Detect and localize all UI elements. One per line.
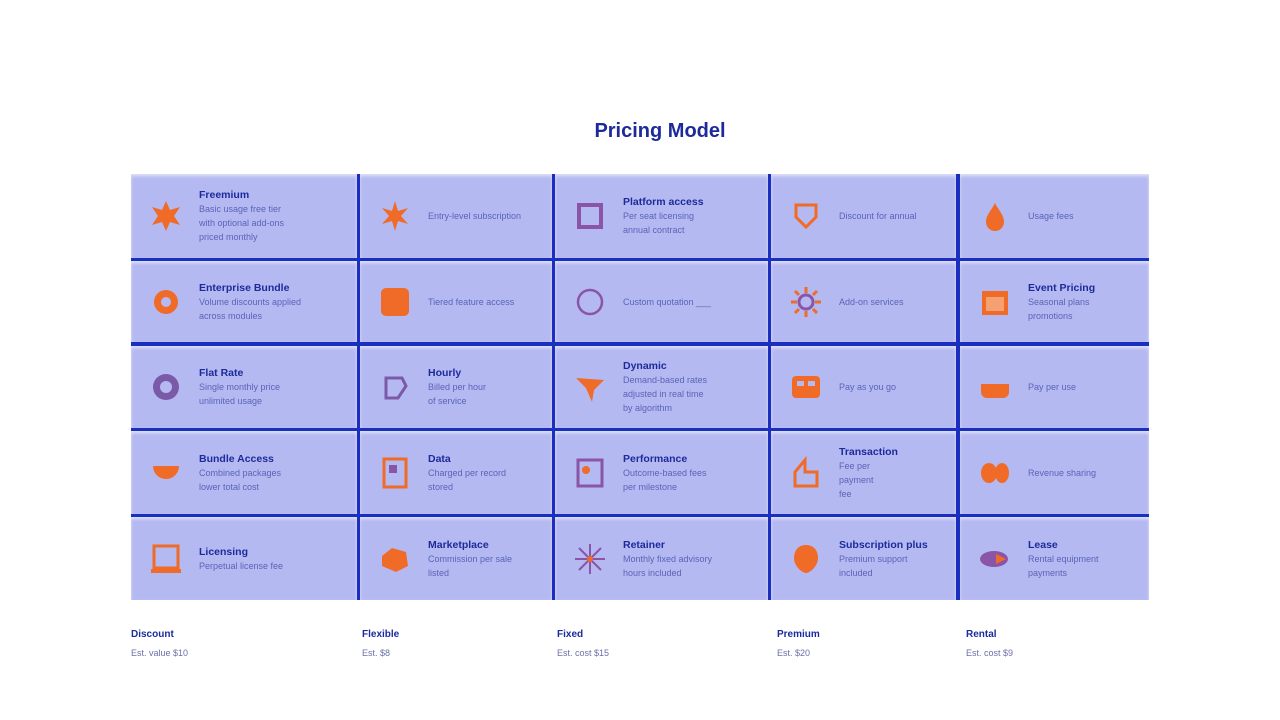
cell r2c5 — [960, 261, 1149, 342]
cell r4c1: Bundle Access — [199, 452, 274, 464]
cell r2c1: Volume discounts applied — [199, 296, 301, 306]
cell r2c5: Event Pricing — [1028, 282, 1095, 294]
cell r2c2: Tiered feature access — [428, 296, 514, 306]
cell r5c5: Lease — [1028, 538, 1058, 550]
cell r4c1: lower total cost — [199, 482, 259, 492]
cell r5c4: Premium support — [839, 554, 908, 564]
cell r1c3 — [555, 174, 768, 258]
cell r5c2: Marketplace — [428, 538, 489, 550]
cell r3c3 — [555, 346, 768, 428]
cell r3c5 — [960, 346, 1149, 428]
cell r4c4: payment — [839, 474, 874, 484]
legend: column 1: Est. value $10 — [131, 648, 188, 658]
cell r4c2 — [360, 431, 552, 514]
cell r1c1: with optional add-ons — [199, 218, 284, 228]
legend: column 5: Est. cost $9 — [966, 648, 1013, 658]
cell r4c2: Data — [428, 452, 451, 464]
cell r4c4: Transaction — [839, 446, 898, 458]
cell r3c1 — [131, 346, 357, 428]
cell r1c2: Entry-level subscription — [428, 211, 521, 221]
legend: column 3 — [557, 629, 609, 658]
legend: column 5: Rental — [966, 629, 997, 640]
cell r1c1 — [131, 174, 357, 258]
cell r4c3: Outcome-based fees — [623, 468, 707, 478]
cell r5c4: Subscription plus — [839, 538, 928, 550]
cell r3c5: Pay per use — [1028, 382, 1076, 392]
cell r1c3: Per seat licensing — [623, 211, 694, 221]
legend: column 5 — [966, 629, 1013, 658]
cell r1c2 — [360, 174, 552, 258]
cell r3c1: Flat Rate — [199, 367, 243, 379]
cell r5c5 — [960, 517, 1149, 600]
cell r4c4 — [771, 431, 956, 514]
cell r3c1: Single monthly price — [199, 382, 280, 392]
cell r2c5: promotions — [1028, 310, 1073, 320]
cell r3c1: unlimited usage — [199, 396, 262, 406]
cell r3c2 — [360, 346, 552, 428]
cell r2c1 — [131, 261, 357, 342]
cell r5c4: included — [839, 568, 873, 578]
cell r5c5: Rental equipment — [1028, 554, 1099, 564]
cell r5c2: Commission per sale — [428, 554, 512, 564]
cell r1c3: Platform access — [623, 196, 704, 208]
cell r2c4: Add-on services — [839, 296, 904, 306]
legend: column 2 — [362, 629, 399, 658]
cell r3c2: Hourly — [428, 367, 461, 379]
cell r2c1: across modules — [199, 310, 262, 320]
title: Pricing Model — [594, 120, 726, 142]
legend: column 3: Est. cost $15 — [557, 648, 609, 658]
cell r4c2: Charged per record — [428, 468, 506, 478]
cell r3c2: Billed per hour — [428, 382, 486, 392]
legend: column 4 — [777, 629, 820, 658]
cell r5c3: Retainer — [623, 538, 665, 550]
cell r4c3 — [555, 431, 768, 514]
cell r1c1: priced monthly — [199, 232, 258, 242]
cell r2c5: Seasonal plans — [1028, 296, 1090, 306]
cell r4c1: Combined packages — [199, 468, 281, 478]
cell r5c5: payments — [1028, 568, 1067, 578]
cell r5c3: hours included — [623, 568, 682, 578]
cell r4c4: fee — [839, 488, 852, 498]
legend: column 4: Premium — [777, 629, 820, 640]
cell r3c3: adjusted in real time — [623, 389, 704, 399]
cell r5c3: Monthly fixed advisory — [623, 554, 712, 564]
cell r4c3: Performance — [623, 452, 687, 464]
legend: column 2: Est. $8 — [362, 648, 390, 658]
cell r3c3: Demand-based rates — [623, 375, 707, 385]
cell r5c1: Perpetual license fee — [199, 560, 283, 570]
cell r3c2: of service — [428, 396, 467, 406]
cell r1c1: Basic usage free tier — [199, 204, 281, 214]
cell r3c4 — [771, 346, 956, 428]
cell r4c5: Revenue sharing — [1028, 468, 1096, 478]
cell r2c2 — [360, 261, 552, 342]
legend: column 1 — [131, 629, 188, 658]
cell r2c3: Custom quotation ___ — [623, 296, 711, 306]
cell r2c4 — [771, 261, 956, 342]
legend: column 1: Discount — [131, 629, 174, 640]
cell r4c1 — [131, 431, 357, 514]
cell r2c3 — [555, 261, 768, 342]
cell r1c3: annual contract — [623, 225, 685, 235]
cell r1c1: Freemium — [199, 189, 249, 201]
cell r5c4 — [771, 517, 956, 600]
cell r1c4 — [771, 174, 956, 258]
cell r3c4: Pay as you go — [839, 382, 896, 392]
cell r5c1 — [131, 517, 357, 600]
cell r4c5 — [960, 431, 1149, 514]
cell r1c4: Discount for annual — [839, 211, 917, 221]
panel: pricing grid — [131, 174, 1149, 600]
cell r5c2: listed — [428, 568, 449, 578]
cell r5c2 — [360, 517, 552, 600]
cell r5c1: Licensing — [199, 546, 248, 558]
cell r3c3: Dynamic — [623, 360, 667, 372]
cell r3c3: by algorithm — [623, 403, 672, 413]
legend: column 2: Flexible — [362, 629, 399, 640]
cell r1c5 — [960, 174, 1149, 258]
cell r4c2: stored — [428, 482, 453, 492]
cell r1c5: Usage fees — [1028, 211, 1074, 221]
legend: column 3: Fixed — [557, 629, 583, 640]
cell r4c4: Fee per — [839, 460, 870, 470]
cell r4c3: per milestone — [623, 482, 677, 492]
cell r2c1: Enterprise Bundle — [199, 282, 289, 294]
legend: column 4: Est. $20 — [777, 648, 810, 658]
cell r5c3 — [555, 517, 768, 600]
